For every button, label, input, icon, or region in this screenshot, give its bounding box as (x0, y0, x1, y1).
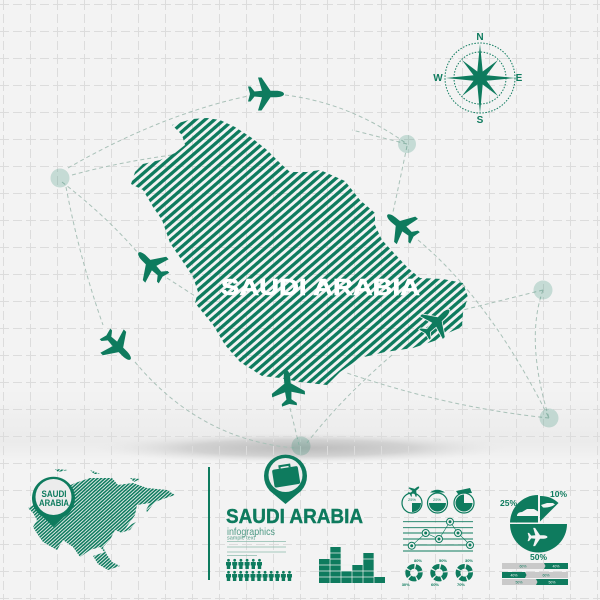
donut charts: 60% (431, 582, 439, 587)
plane: over map (412, 298, 461, 347)
donut charts: 30% (402, 582, 410, 587)
line chart (403, 518, 474, 551)
transport pie chart: 50% (530, 552, 547, 562)
mini map pin (32, 477, 75, 527)
percentage bars: 40% (552, 564, 560, 568)
striped map of Saudi Arabia (131, 118, 468, 385)
plane: bottom (270, 369, 306, 407)
suitcase pin (264, 455, 307, 504)
icon: suitcase (271, 462, 300, 488)
icon: car (517, 509, 539, 516)
divider (208, 467, 210, 580)
plane: lower left (93, 322, 142, 371)
percentage bars: 50% (515, 580, 523, 584)
donut charts: 70% (457, 582, 465, 587)
route lines (62, 95, 549, 448)
map title: SAUDI ARABIA (221, 274, 420, 300)
bar chart (319, 547, 385, 583)
plane: right upper (377, 202, 426, 251)
compass: S (477, 115, 484, 126)
percentage bars: 60% (519, 564, 527, 568)
pie gauges: 25% (464, 497, 472, 502)
mini map pin: ARABIA (39, 498, 69, 509)
route nodes (50, 135, 558, 456)
percentage bars: 40% (510, 574, 518, 578)
percentage bars: 60% (542, 574, 550, 578)
compass (433, 32, 523, 126)
heading: SAUDI ARABIA (226, 506, 363, 528)
subheading: infographics (227, 527, 275, 538)
compass: N (476, 32, 484, 43)
donut charts: 50% (439, 558, 447, 563)
sample text: sample text (227, 536, 256, 542)
pie gauges: 25% (408, 497, 416, 502)
compass: E (516, 73, 523, 84)
donut charts: 80% (414, 558, 422, 563)
icon: boat (541, 503, 555, 508)
plane: left (127, 241, 176, 290)
percentage bars (502, 563, 568, 585)
pie gauges: 25% (433, 497, 441, 502)
transport pie chart: 25% (500, 498, 517, 508)
icon: plane (528, 528, 547, 546)
donut charts: 30% (465, 558, 473, 563)
mini map pin: SAUDI (42, 489, 66, 500)
compass: W (433, 73, 443, 84)
transport pie chart (500, 489, 567, 562)
text lines (227, 542, 286, 556)
donut charts (402, 558, 473, 587)
icons on gauges (406, 482, 472, 499)
percentage bars: 50% (548, 580, 556, 584)
transport pie chart: 10% (550, 489, 567, 499)
plane: top (248, 78, 284, 110)
mini Asia map (28, 469, 175, 570)
pie gauges (402, 482, 474, 513)
people icons (226, 559, 292, 581)
